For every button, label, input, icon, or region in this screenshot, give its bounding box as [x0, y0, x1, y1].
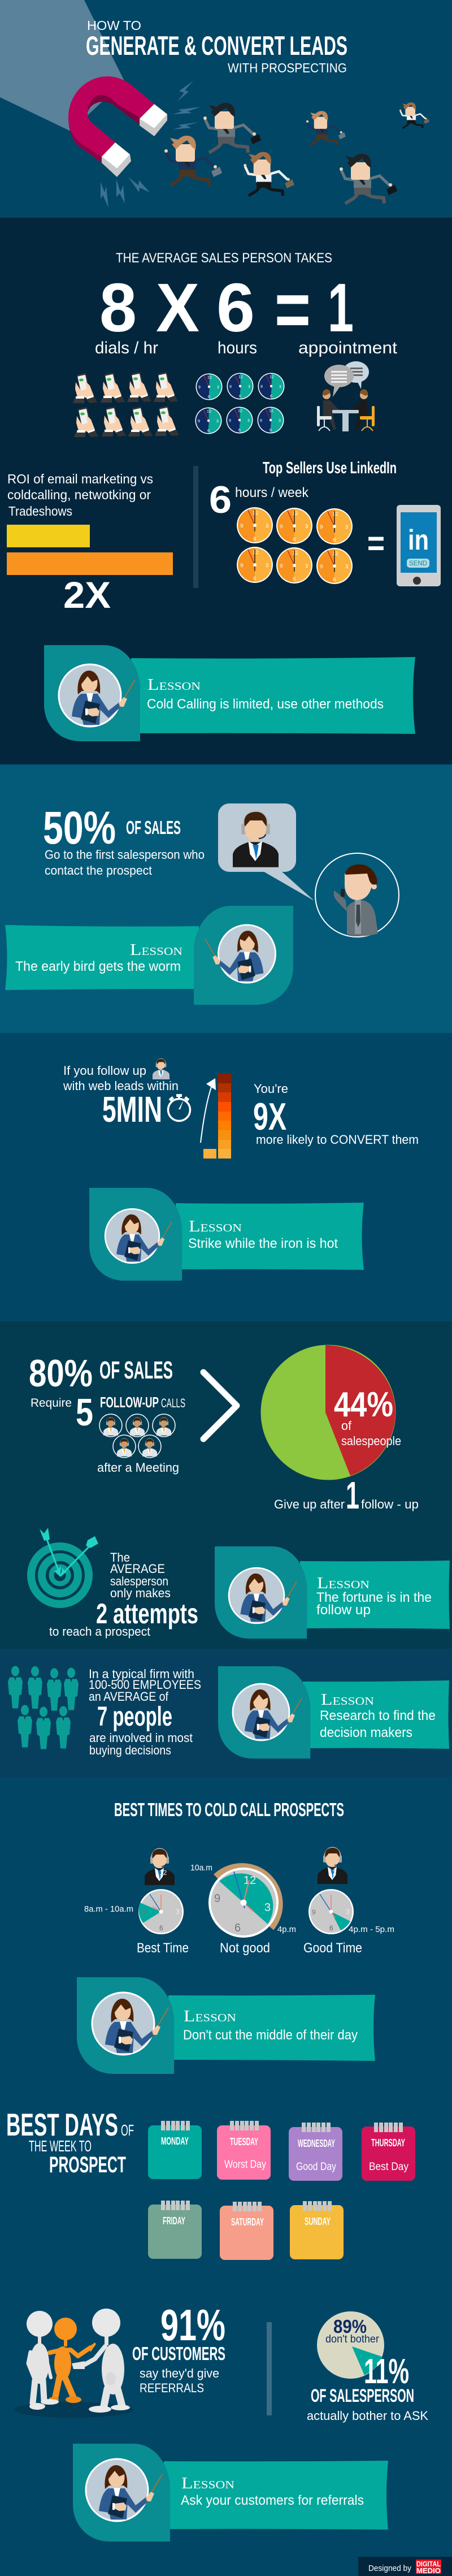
- equation: 1: [328, 269, 354, 346]
- stat: 11% of salesperson: actually bother to ASK: [307, 2409, 428, 2423]
- heading: best days: BEST DAYS: [6, 2107, 118, 2142]
- equation: =: [275, 265, 311, 353]
- text: 2 attempts: only makes: [110, 1586, 171, 1600]
- stat: 50% of sales: OF SALES: [126, 817, 181, 838]
- footer: designed by Digital Medio: MEDIO: [416, 2566, 441, 2575]
- lesson callout: middle of day: [77, 1977, 375, 2074]
- equation: [99, 265, 354, 353]
- lesson callout: referrals: Lesson: [181, 2474, 234, 2492]
- lesson callout: strike: Lesson: [189, 1217, 242, 1235]
- icon: horseshoe magnet: [68, 76, 167, 177]
- calendar: Wednesday: Good Day: [296, 2161, 336, 2173]
- calendar: Monday: [148, 2121, 202, 2179]
- stat: 11% of salesperson: 11%: [364, 2352, 409, 2391]
- pie chart: 44% give up: [261, 1345, 401, 1480]
- stat: 9X: more likely to CONVERT them: [256, 1133, 419, 1147]
- clock labels: 4p.m: [277, 1925, 296, 1934]
- icon: target with arrows: [31, 1528, 98, 1604]
- panel: decision makers: [0, 1649, 452, 1777]
- equation labels: hours: [218, 339, 257, 357]
- text: ROI of email marketing: coldcalling, netwotking or: [7, 487, 151, 502]
- stat: 80% of sales: OF SALES: [99, 1356, 173, 1384]
- calendar: Saturday: [220, 2202, 273, 2260]
- prospect on phone in circle: [315, 853, 399, 937]
- title: [86, 18, 347, 75]
- stat: 80% of sales: CALLS: [161, 1396, 185, 1410]
- calendar: Friday: [148, 2201, 202, 2259]
- stat: 80% of sales: [29, 1352, 185, 1434]
- lesson callout: middle of day: Don't cut the middle of their day: [183, 2028, 358, 2043]
- calendar: Wednesday: WEDNESDAY: [298, 2138, 335, 2149]
- pie chart: 89% vs 11%: don't bother: [325, 2333, 380, 2345]
- icon: agent: [153, 1058, 169, 1079]
- text: ROI of email marketing: Tradeshows: [8, 504, 72, 518]
- icon: six orange clocks: [237, 507, 353, 584]
- calendar: Tuesday: Worst Day: [224, 2159, 266, 2171]
- stat: 50% of sales: 50%: [43, 802, 116, 854]
- heading: best days: THE WEEK TO: [29, 2137, 92, 2155]
- clock: not good: [208, 1866, 280, 1938]
- text: 2 attempts: The: [110, 1550, 130, 1564]
- heading: best days: PROSPECT: [49, 2153, 126, 2177]
- icon: six hour clocks: [195, 373, 285, 434]
- greater-than chevron: [203, 1372, 237, 1439]
- stat: 50% of sales: [43, 802, 205, 878]
- pie chart: 44% give up: 44%: [334, 1385, 393, 1424]
- lesson callout: fortune: [215, 1546, 450, 1639]
- equation labels: dials / hr: [95, 339, 158, 357]
- lesson callout: early bird: Lesson: [130, 941, 182, 959]
- stat: 6 hours per week: [209, 478, 309, 521]
- heading: best days: [6, 2107, 134, 2177]
- text: 7 people: [89, 1667, 201, 1757]
- clock: best time: 9: [142, 1908, 146, 1916]
- lesson callout: research: decision makers: [320, 1725, 412, 1740]
- text: 2 attempts: 2 attempts: [96, 1598, 198, 1630]
- clock labels: [84, 1863, 394, 1956]
- clock: good time: 3: [346, 1908, 350, 1916]
- stat: 80% of sales: FOLLOW-UP: [100, 1394, 159, 1411]
- text: 7 people: are involved in most: [89, 1731, 193, 1745]
- running prospect: dark hair grey suit: [203, 103, 261, 153]
- text: 2 attempts: [49, 1550, 198, 1639]
- clock: good time: 9: [312, 1908, 316, 1916]
- stat: 9X: 9X: [253, 1095, 286, 1138]
- clock labels: Not good: [220, 1940, 270, 1956]
- clock labels: Best Time: [137, 1940, 189, 1956]
- text: 7 people: 7 people: [97, 1702, 172, 1732]
- text: follow up within: [63, 1064, 179, 1130]
- calendar: Thursday: [362, 2123, 415, 2181]
- clock: not good: 6: [234, 1922, 241, 1934]
- text: 7 people: 100-500 EMPLOYEES: [89, 1678, 201, 1692]
- icon: magnetic lightning bolts: [101, 81, 201, 208]
- heading: THE AVERAGE SALES PERSON TAKES: [116, 250, 332, 266]
- icon: stopwatch: [168, 1094, 190, 1121]
- calendar: Thursday: THURSDAY: [371, 2137, 405, 2149]
- icon: agent right: [318, 1848, 347, 1884]
- stat: 91% of customers: say they'd give: [140, 2366, 219, 2380]
- clock: best time: 6: [159, 1924, 163, 1932]
- figures discussing referrals: [14, 2309, 133, 2418]
- lesson callout: middle of day: Lesson: [184, 2007, 236, 2025]
- title: HOW TO: [87, 18, 141, 33]
- equation: 6: [216, 269, 255, 346]
- stat: 80% of sales: 80%: [29, 1352, 93, 1395]
- stat: 91% of customers: REFERRALS: [140, 2381, 204, 2395]
- stat: 11% of salesperson: [307, 2352, 428, 2423]
- running prospect: brown hair navy suit: [164, 136, 222, 185]
- footer: designed by Digital Medio: Designed by: [368, 2564, 411, 2573]
- lesson callout: referrals: [73, 2444, 388, 2542]
- text: follow up within: 5MIN: [102, 1089, 162, 1130]
- calendar: Tuesday: TUESDAY: [230, 2136, 258, 2147]
- pie chart: 44% give up: salespeople: [341, 1434, 401, 1448]
- stat: 91% of customers: [132, 2300, 225, 2395]
- lesson callout: cold calling: Cold Calling is limited, use other methods: [147, 697, 384, 712]
- equation labels: appointment: [298, 339, 398, 357]
- pie chart: 89% vs 11%: [317, 2311, 384, 2379]
- text: after a meeting: after a Meeting: [97, 1460, 179, 1475]
- text: 2 attempts: to reach a prospect: [49, 1624, 150, 1639]
- running prospect: far: [306, 111, 346, 145]
- clock: best time: [138, 1869, 184, 1934]
- clock: good time: 6: [329, 1924, 333, 1932]
- lesson callout: referrals: Ask your customers for referrals: [181, 2493, 364, 2508]
- calendar: Tuesday: [217, 2121, 271, 2180]
- running prospect: farthest: [399, 102, 429, 128]
- footer: designed by Digital Medio: DIGITAL: [416, 2560, 441, 2568]
- calendar: Wednesday: [289, 2123, 342, 2181]
- text: 2 attempts: AVERAGE: [110, 1562, 165, 1576]
- text: 7 people: In a typical firm with: [89, 1667, 194, 1681]
- stat: 6 hours per week: hours / week: [235, 485, 309, 500]
- text: ROI of email marketing: ROI of email marketing vs: [7, 472, 153, 486]
- icon: phone with LinkedIn: in: [408, 524, 429, 556]
- icon: seven people: [8, 1666, 79, 1749]
- lesson callout: strike: Strike while the iron is hot: [188, 1236, 338, 1251]
- text: 7 people: buying decisions: [89, 1743, 171, 1757]
- lesson callout: early bird: [5, 906, 293, 1005]
- clock labels: 4p.m - 5p.m: [349, 1925, 394, 1934]
- stat: 50% of sales: Go to the first salesperson who: [45, 848, 205, 862]
- text: give up after 1 follow-up: [274, 1474, 419, 1517]
- icon: five agent faces: [99, 1414, 175, 1458]
- bar chart: 9X conversion: [203, 1074, 231, 1159]
- text: 2 attempts: salesperson: [110, 1574, 168, 1588]
- icon: meeting with speech bubbles: [317, 361, 375, 431]
- lesson callout: strike: [89, 1188, 364, 1281]
- calendar: Sunday: SUNDAY: [305, 2216, 331, 2227]
- stat: 9X: [253, 1082, 419, 1147]
- clock: not good: 9: [214, 1892, 220, 1905]
- panel: best times and days: [0, 1777, 452, 2576]
- lesson callout: fortune: The fortune is in the: [316, 1590, 432, 1605]
- icon: phone with LinkedIn: SEND: [409, 559, 427, 567]
- clock: good time: 12: [329, 1869, 337, 1877]
- pie chart: 89% vs 11%: 89%: [333, 2316, 367, 2337]
- text: give up after 1 follow-up: Give up after: [274, 1497, 345, 1511]
- clock: good time: [308, 1869, 354, 1934]
- panel: follow-up: [0, 1321, 452, 1649]
- text: 7 people: an AVERAGE of: [89, 1689, 169, 1704]
- panel: first salesperson: [0, 764, 452, 1033]
- footer: designed by Digital Medio: [358, 2557, 452, 2576]
- heading: top sellers: Top Sellers Use LinkedIn: [263, 459, 397, 477]
- lesson callout: cold calling: [44, 645, 415, 741]
- equals sign: =: [367, 524, 385, 563]
- stat: 6 hours per week: 6: [209, 478, 232, 521]
- title: WITH PROSPECTING: [228, 60, 347, 75]
- lesson callout: fortune: Lesson: [317, 1574, 370, 1592]
- lesson callout: research: [218, 1666, 449, 1758]
- stat: 80% of sales: Require: [31, 1397, 72, 1410]
- lesson callout: research: Lesson: [321, 1691, 374, 1709]
- panel: header: [0, 0, 452, 218]
- calendar: Thursday: Best Day: [369, 2161, 408, 2173]
- stat: 80% of sales: 5: [76, 1391, 93, 1434]
- text: follow up within: with web leads within: [63, 1079, 179, 1093]
- panel: average sales person: [0, 218, 452, 764]
- stat: 50% of sales: contact the prospect: [45, 863, 152, 878]
- calendar: Monday: MONDAY: [161, 2136, 189, 2147]
- pie chart: 44% give up: of: [341, 1419, 352, 1433]
- stat: 91% of customers: 91%: [160, 2300, 225, 2350]
- equation labels: [95, 339, 398, 357]
- stat: 91% of customers: OF CUSTOMERS: [132, 2343, 225, 2364]
- panel: web leads: [0, 1033, 452, 1321]
- equation: X: [156, 269, 199, 346]
- running prospect: dark hair right: [340, 154, 397, 204]
- running prospect: white shirt: [244, 152, 294, 196]
- lesson callout: early bird: The early bird gets the worm: [15, 959, 181, 974]
- magnet spotlight beam: [0, 0, 124, 131]
- stat: 9X: You're: [254, 1082, 288, 1096]
- clock: best time: 3: [176, 1908, 180, 1916]
- clock labels: 8a.m - 10a.m: [84, 1904, 133, 1914]
- clock: not good: 12: [244, 1874, 256, 1887]
- calendar: Sunday: [290, 2201, 344, 2259]
- icon: hands dialling phones: [73, 372, 179, 437]
- lesson callout: fortune: follow up: [316, 1602, 371, 1618]
- text: give up after 1 follow-up: 1: [346, 1474, 359, 1517]
- text: ROI of email marketing: [7, 472, 153, 518]
- text: give up after 1 follow-up: follow - up: [361, 1497, 419, 1511]
- equation: 8: [99, 269, 137, 346]
- bar chart: ROI comparison: [7, 525, 173, 575]
- text: follow up within: If you follow up: [63, 1064, 146, 1078]
- clock: best time: 12: [159, 1869, 167, 1877]
- stat: 2X: 2X: [63, 574, 111, 616]
- clock labels: Good Time: [303, 1940, 362, 1956]
- arrow: growth: [201, 1078, 216, 1143]
- lesson callout: research: Research to find the: [320, 1708, 436, 1723]
- speech bubble with agent: [218, 803, 314, 901]
- calendar: Friday: FRIDAY: [163, 2215, 185, 2227]
- clock labels: 10a.m: [190, 1863, 212, 1873]
- icon: agent left: [145, 1849, 175, 1885]
- clock: not good: 3: [264, 1901, 271, 1914]
- lesson callout: cold calling: Lesson: [147, 676, 201, 694]
- heading: best days: OF: [121, 2121, 134, 2139]
- calendar: Saturday: SATURDAY: [231, 2216, 264, 2228]
- icon: phone with LinkedIn: [397, 505, 441, 586]
